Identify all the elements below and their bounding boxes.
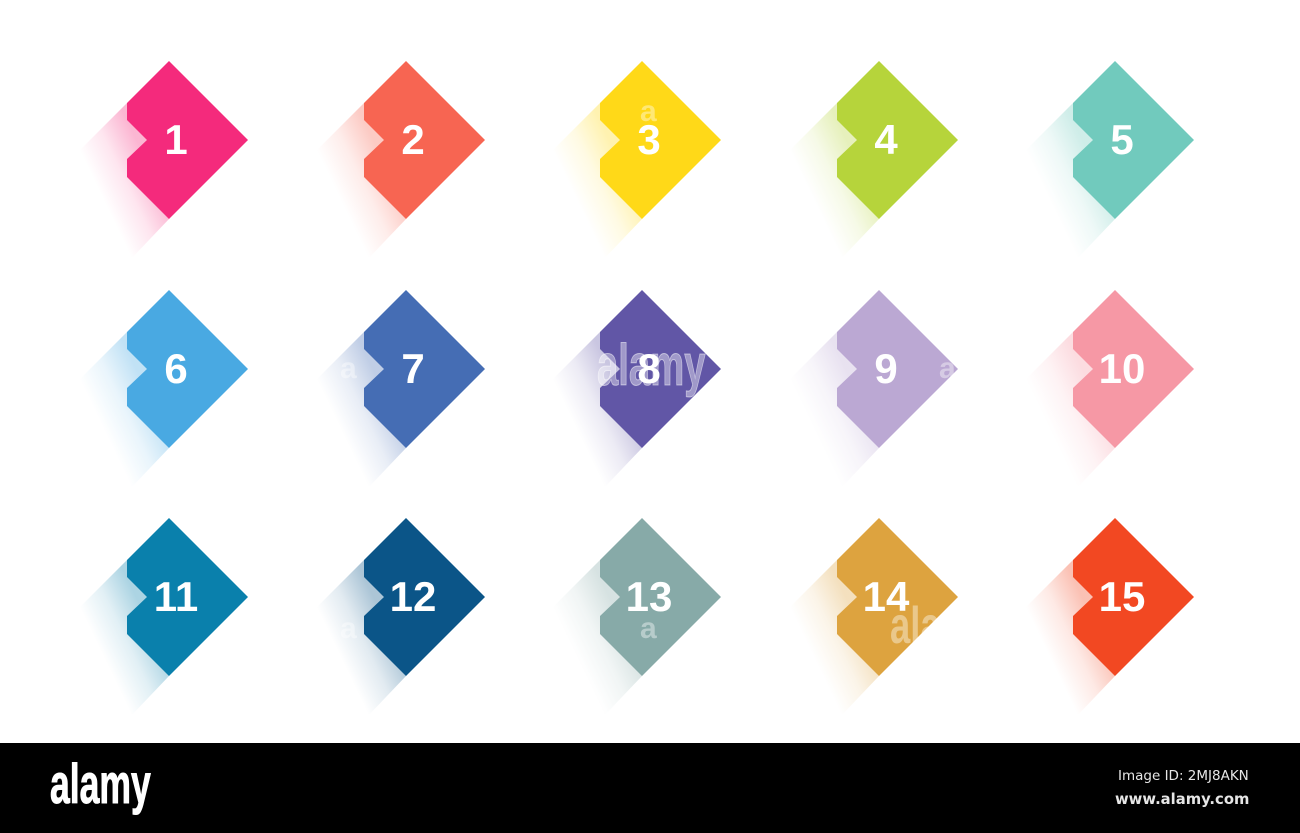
- bullet 10: 10: [1099, 345, 1145, 392]
- bullet 7: a: [340, 352, 357, 385]
- bullet 1: [77, 61, 248, 261]
- bullet 5: 5: [1110, 116, 1134, 163]
- bullet 3: a: [640, 95, 657, 128]
- bullet 8: [550, 290, 721, 490]
- bullet 15: [1023, 518, 1194, 718]
- bullet 4: 4: [874, 116, 898, 163]
- bullet 1: 1: [164, 116, 188, 163]
- image id: Image ID: 2MJ8AKN: [1118, 768, 1249, 784]
- bullet 2: [314, 61, 485, 261]
- bullet 13: a: [640, 612, 657, 645]
- bullet 3: [550, 61, 721, 261]
- bullet 15: 15: [1099, 573, 1145, 620]
- bullet 12: [314, 518, 485, 718]
- bullet 7: 7: [401, 345, 425, 392]
- bullet 11: [77, 518, 248, 718]
- bullet 12: 12: [390, 573, 436, 620]
- bullet 2: 2: [401, 116, 425, 163]
- bullet 9: 9: [874, 345, 898, 392]
- bullet 12: a: [340, 612, 357, 645]
- bullet 9: a: [939, 352, 956, 385]
- bullet 10: [1023, 290, 1194, 490]
- bullet 6: [77, 290, 248, 490]
- bullet 9: [787, 290, 958, 490]
- website: www.alamy.com: [1115, 791, 1249, 808]
- bullet 14: 14: [863, 573, 910, 620]
- bullet 5: [1023, 61, 1194, 261]
- bullet 13: [550, 518, 721, 718]
- bullet 11: 11: [154, 573, 198, 620]
- bullet 13: 13: [626, 573, 672, 620]
- bullet 8: 8: [637, 345, 661, 392]
- bullet 4: [787, 61, 958, 261]
- bullet 8: alamy: [597, 334, 706, 398]
- footer logo: alamy: [50, 753, 151, 815]
- bullet 14: ala: [890, 595, 941, 655]
- bullet 3: 3: [637, 116, 661, 163]
- bullet 7: [314, 290, 485, 490]
- bullet 14: [787, 518, 958, 718]
- footer band: [0, 743, 1300, 833]
- bullet 6: 6: [164, 345, 188, 392]
